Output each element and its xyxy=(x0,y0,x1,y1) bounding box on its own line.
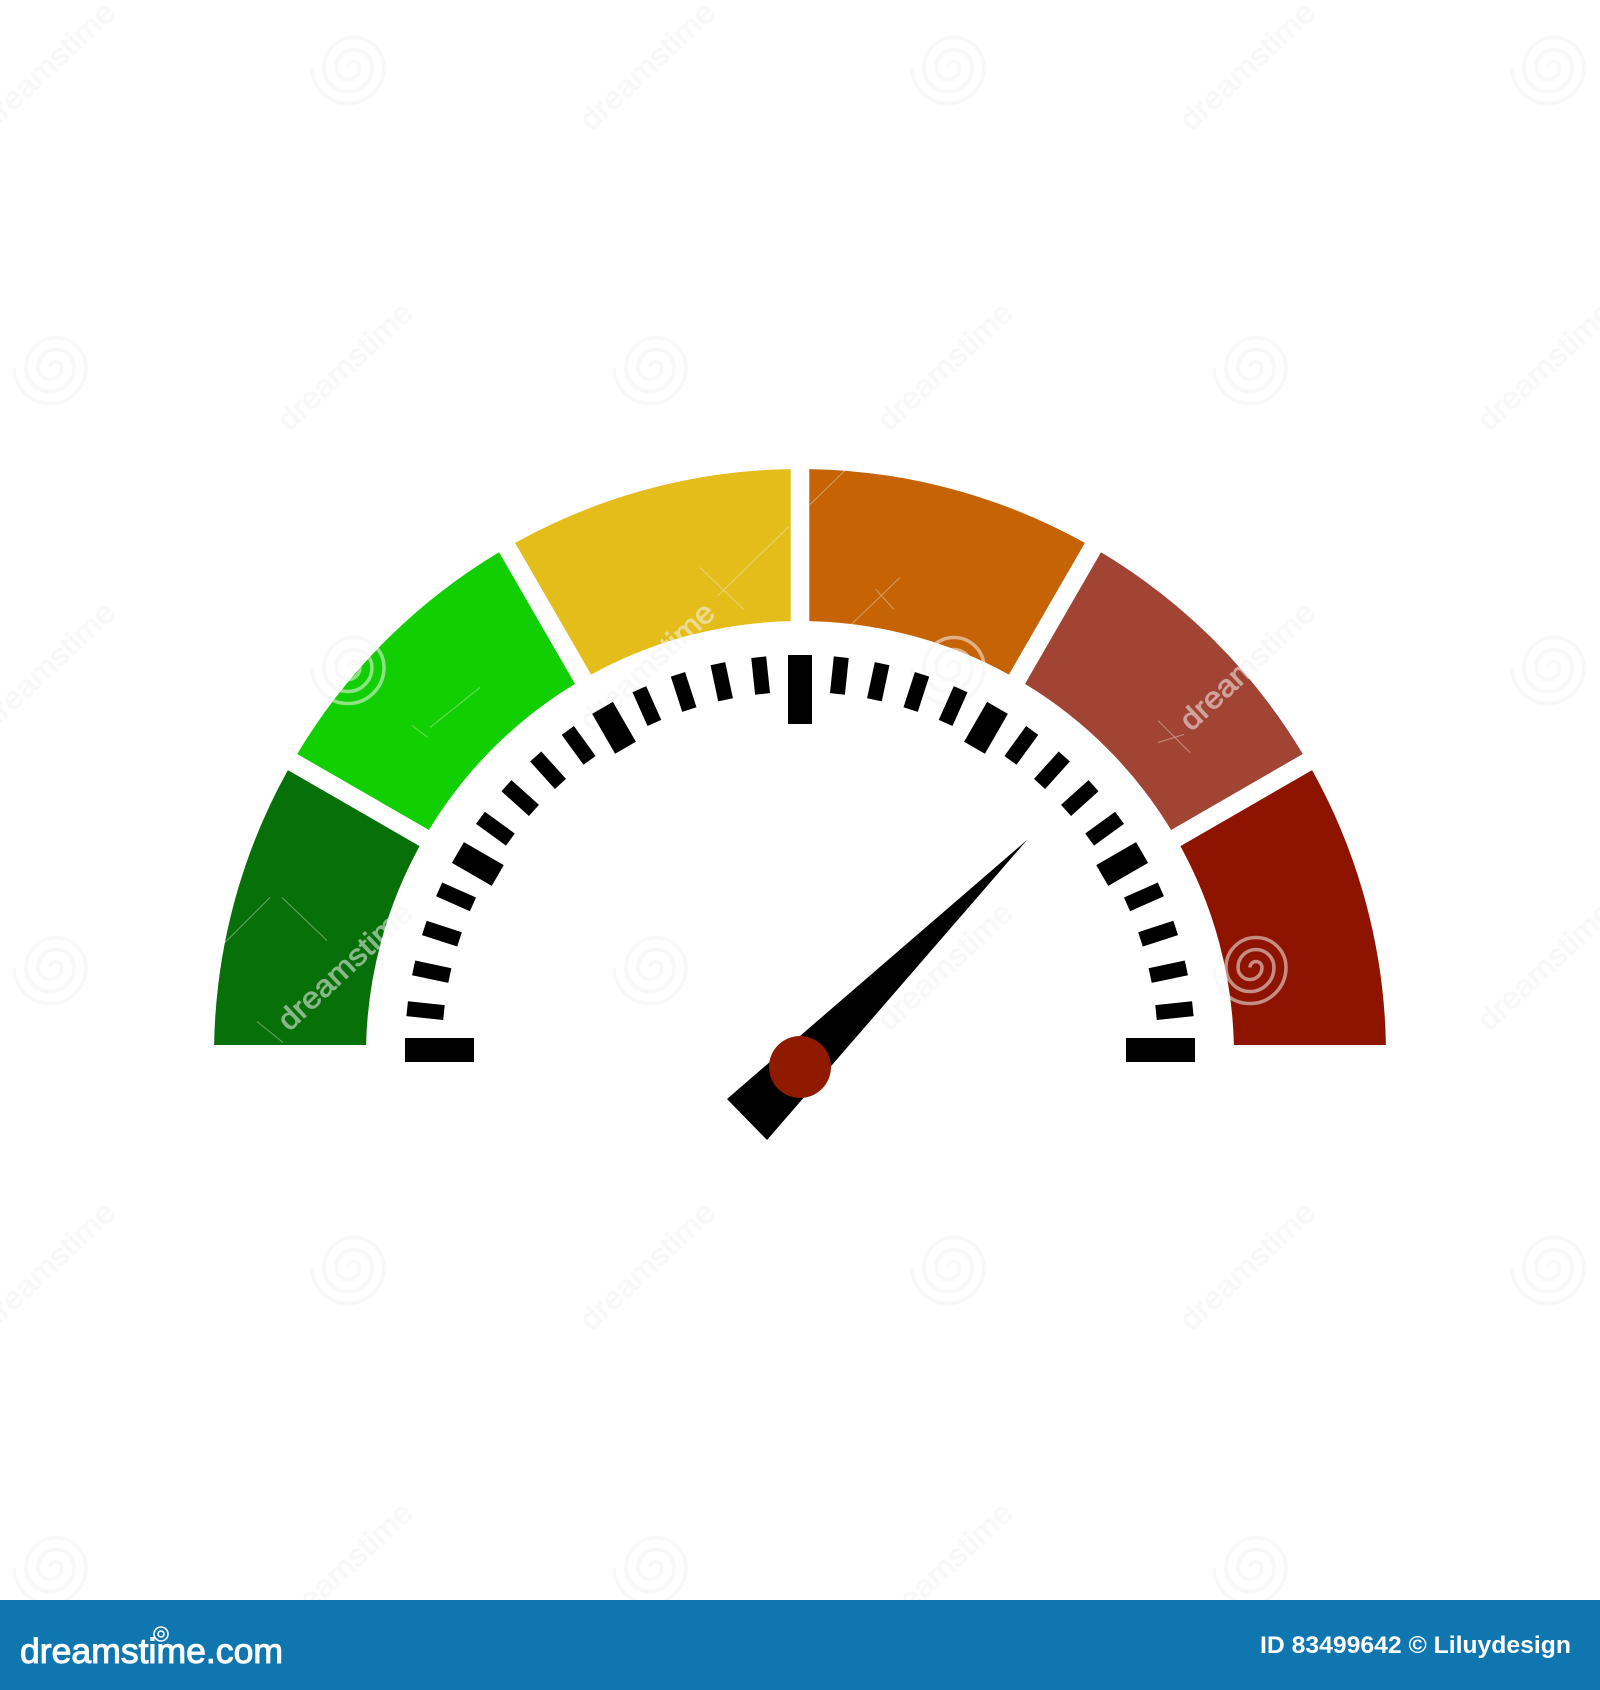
watermark pattern: dreamstime xyxy=(573,1196,722,1337)
segment: yellow xyxy=(515,469,791,675)
watermark pattern: dreamstime xyxy=(1173,596,1322,737)
watermark pattern: dreamstime xyxy=(871,296,1020,437)
watermark pattern: dreamstime xyxy=(271,896,420,1037)
watermark pattern: dreamstime xyxy=(871,1496,1020,1637)
watermark pattern: dreamstime xyxy=(271,296,420,437)
tick marks scale xyxy=(405,655,1195,1062)
gauge coloured arc xyxy=(214,469,1386,1045)
segment: bright green xyxy=(297,552,575,830)
watermark pattern: dreamstime xyxy=(573,0,722,137)
watermark pattern: dreamstime xyxy=(871,896,1020,1037)
segment: dark green xyxy=(214,770,420,1045)
footer bar xyxy=(0,1600,1600,1690)
watermark pattern: dreamstime xyxy=(1173,0,1322,137)
watermark pattern: dreamstime xyxy=(1173,1196,1322,1337)
needle hub xyxy=(769,1036,831,1098)
needle xyxy=(727,840,1027,1140)
segment: dark red xyxy=(1180,770,1386,1045)
footer logo text: dreamstime.com xyxy=(20,1632,283,1671)
watermark pattern: dreamstime xyxy=(271,1496,420,1637)
segment: orange xyxy=(809,469,1085,675)
watermark pattern: dreamstime xyxy=(573,596,722,737)
segment: brick red xyxy=(1025,552,1303,830)
footer credit text: ID 83499642 © Liluydesign xyxy=(1260,1632,1571,1659)
footer logo spiral icon xyxy=(154,1627,168,1641)
